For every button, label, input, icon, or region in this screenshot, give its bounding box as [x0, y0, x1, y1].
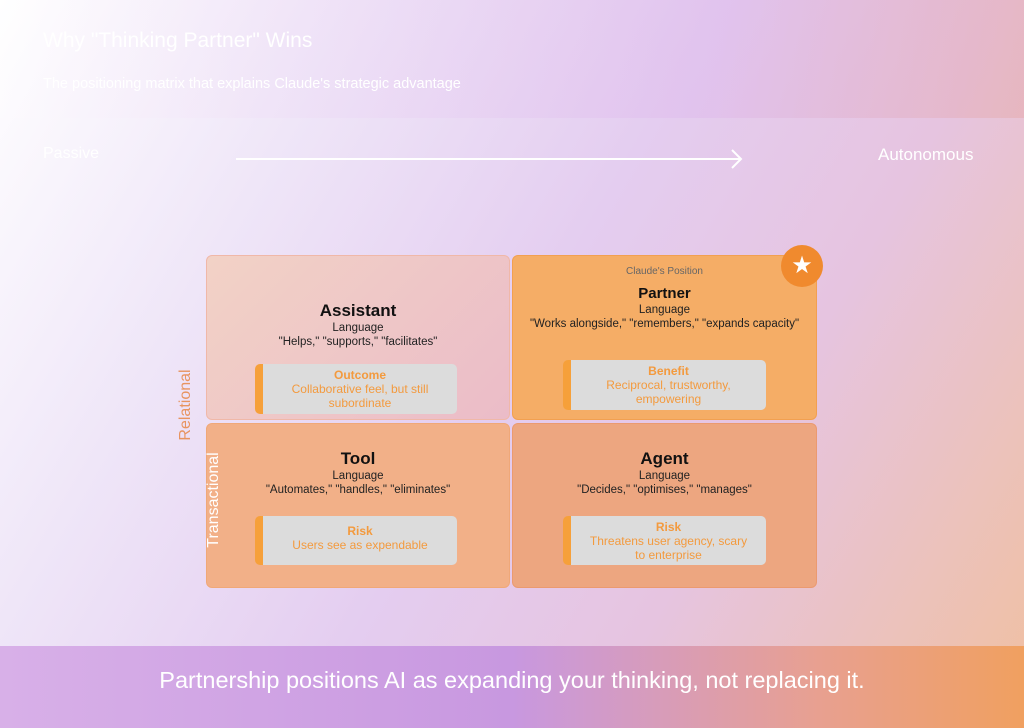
quadrant: tool: Language [332, 470, 384, 482]
quadrant: partner: Claude's Position [626, 266, 703, 277]
risk box: Risk [347, 524, 373, 538]
risk box agent: Threatens user agency, scary to enterprise [590, 534, 747, 562]
quadrant: partner [512, 255, 817, 420]
outcome box [255, 364, 457, 414]
quadrant: assistant: Assistant [320, 301, 396, 320]
benefit box: Reciprocal, trustworthy, empowering [606, 378, 731, 406]
risk box [255, 516, 457, 565]
benefit box [563, 360, 766, 410]
outcome box: Outcome [334, 368, 386, 382]
footer banner [0, 646, 1024, 728]
subtitle: The positioning matrix that explains Claude's strategic advantage [43, 76, 461, 92]
quadrant: partner: Partner [638, 285, 691, 302]
quadrant: assistant [206, 255, 510, 420]
axis label: autonomous: Autonomous [878, 145, 973, 164]
quadrant: assistant: "Helps," "supports," "facilitates" [279, 336, 437, 348]
quadrant: partner: "Works alongside," "remembers," "expands capacity" [530, 318, 799, 330]
quadrant: agent: Agent [640, 449, 689, 468]
risk box agent: Risk [656, 520, 681, 534]
arrow: passive to autonomous [236, 149, 742, 169]
quadrant: partner: Language [639, 304, 690, 316]
header band [0, 0, 1024, 118]
quadrant: tool: "Automates," "handles," "eliminates" [266, 484, 450, 496]
risk box: Users see as expendable [292, 538, 428, 552]
icon: star badge: ★ [791, 252, 813, 279]
quadrant: tool [206, 423, 510, 588]
footer banner: Partnership positions AI as expanding your thinking, not replacing it. [159, 667, 865, 693]
quadrant: agent [512, 423, 817, 588]
quadrant: agent: Language [639, 470, 690, 482]
text: Relational [177, 369, 194, 441]
outcome box: Collaborative feel, but still subordinate [292, 382, 428, 410]
axis label: transactional: Transactional [205, 452, 222, 548]
quadrant: tool: Tool [341, 449, 375, 468]
title: Why "Thinking Partner" Wins [43, 29, 312, 52]
axis label: passive: Passive [43, 145, 99, 162]
icon: star badge [781, 245, 823, 287]
risk box agent [563, 516, 766, 565]
quadrant: assistant: Language [332, 322, 384, 334]
quadrant: agent: "Decides," "optimises," "manages" [577, 484, 752, 496]
benefit box: Benefit [648, 364, 689, 378]
